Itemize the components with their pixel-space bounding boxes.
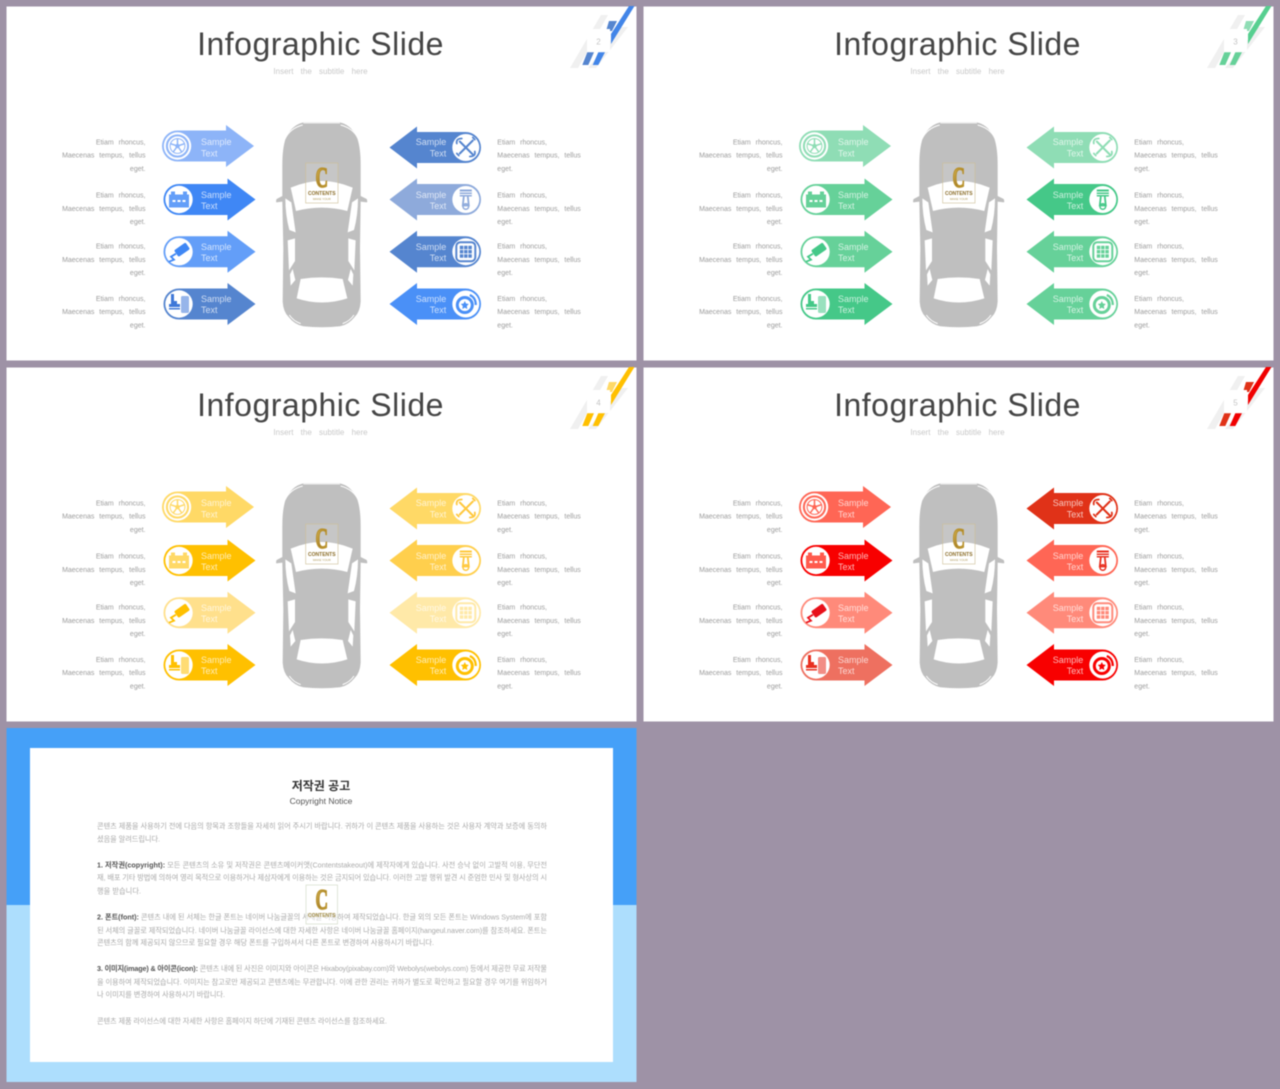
right arrows with icons: Text — [1067, 253, 1084, 263]
right arrows with icons: Sample — [416, 137, 446, 147]
logo watermark: C — [316, 163, 328, 194]
left arrows with icons: Text — [838, 253, 855, 263]
left descriptions — [62, 500, 146, 690]
left descriptions: Maecenas tempus, tellus — [62, 309, 146, 316]
right descriptions: Etiam rhoncus, — [1134, 657, 1184, 664]
left descriptions: eget. — [767, 270, 783, 277]
logo watermark: CONTENTS — [308, 913, 336, 919]
section 3: image and icon: 나 이미지를 변경하여 사용하시기 바랍니다. — [97, 990, 225, 999]
right arrows with icons: Text — [430, 253, 447, 263]
right descriptions: eget. — [1134, 580, 1150, 587]
right descriptions: Maecenas tempus, tellus — [497, 257, 581, 264]
left arrows with icons: Sample — [838, 655, 869, 665]
left arrows with icons: Sample — [201, 655, 232, 665]
right arrows with icons: Text — [430, 201, 447, 211]
right arrows with icons — [1026, 488, 1118, 686]
right arrows with icons: Sample — [416, 655, 446, 665]
right arrows with icons: Sample — [1053, 294, 1083, 304]
intro paragraph: 셨음을 알려드립니다. — [97, 834, 160, 844]
right descriptions: Etiam rhoncus, — [497, 554, 547, 560]
left descriptions: Maecenas tempus, tellus — [699, 567, 783, 574]
left arrows with icons: Text — [838, 562, 855, 572]
left descriptions: eget. — [767, 322, 783, 330]
left descriptions: eget. — [130, 322, 146, 330]
logo watermark: C — [316, 524, 328, 555]
left arrows with icons: Text — [201, 253, 218, 263]
car illustration — [913, 483, 1004, 688]
logo watermark: C — [953, 524, 965, 555]
section 2: font: 2. 폰트(font): 콘텐츠 내에 된 서체는 한글 폰트는 네이버 나눔글꼴의 서체를 이용하여 제작되었습니다. 한글 외의 모든 폰트는 Windows System에 포함 — [97, 912, 547, 922]
left descriptions: eget. — [767, 631, 783, 638]
right descriptions: eget. — [1134, 527, 1150, 534]
logo watermark — [306, 524, 338, 564]
left arrows with icons: Text — [201, 562, 218, 572]
right arrows with icons: Text — [1067, 666, 1084, 676]
right descriptions: Etiam rhoncus, — [497, 500, 547, 508]
left descriptions: Etiam rhoncus, — [733, 554, 783, 560]
car illustration — [276, 483, 367, 688]
left arrows with icons: Text — [838, 614, 855, 624]
right arrows with icons: Sample — [1053, 603, 1083, 613]
right descriptions: Maecenas tempus, tellus — [1134, 670, 1218, 677]
section 2: font — [97, 912, 547, 947]
left descriptions: Etiam rhoncus, — [96, 554, 146, 560]
title: Infographic Slide — [197, 387, 444, 423]
panel: yellow infographic slide — [6, 367, 636, 722]
left descriptions: Maecenas tempus, tellus — [62, 618, 146, 625]
left descriptions: eget. — [130, 270, 146, 277]
car illustration — [913, 122, 1004, 327]
left arrows with icons: Text — [201, 201, 218, 211]
left descriptions: eget. — [767, 580, 783, 587]
left descriptions: Maecenas tempus, tellus — [699, 206, 783, 213]
left arrows with icons: Sample — [201, 190, 232, 200]
left descriptions: Etiam rhoncus, — [96, 140, 146, 146]
right descriptions: eget. — [1134, 631, 1150, 638]
right arrows with icons: Text — [1067, 562, 1084, 572]
right arrows with icons: Text — [430, 562, 447, 572]
right arrows with icons: Sample — [416, 551, 446, 561]
left descriptions: Etiam rhoncus, — [733, 296, 783, 303]
left descriptions: Maecenas tempus, tellus — [62, 257, 146, 264]
right descriptions: Maecenas tempus, tellus — [497, 618, 581, 625]
left arrows with icons: Text — [838, 201, 855, 211]
right descriptions — [497, 140, 581, 330]
left descriptions: Etiam rhoncus, — [733, 244, 783, 250]
right descriptions: Maecenas tempus, tellus — [1134, 257, 1218, 264]
right descriptions: eget. — [497, 527, 513, 534]
right arrows with icons — [1026, 126, 1118, 325]
logo watermark: MAKE YOUR — [313, 197, 332, 201]
left descriptions: eget. — [130, 631, 146, 638]
left descriptions — [62, 140, 146, 330]
title: Infographic Slide — [834, 26, 1081, 62]
right descriptions: eget. — [497, 270, 513, 277]
left arrows with icons: Sample — [838, 551, 869, 561]
right arrows with icons: Text — [430, 510, 447, 520]
right descriptions: eget. — [497, 219, 513, 226]
section 1: copyright: 재, 배포 기타 방법에 의하여 영리 목적으로 이용하거나 제삼자에게 이용하는 것은 금지되어 있습니다. 이러한 고발 행위 발견 시 준엄한 민사 및 형사상의 시 — [97, 873, 547, 882]
subtitle: Insert the subtitle here — [910, 67, 1005, 76]
logo watermark: MAKE YOUR — [950, 197, 969, 201]
right descriptions: Etiam rhoncus, — [497, 140, 547, 146]
right descriptions: Etiam rhoncus, — [1134, 554, 1184, 560]
left arrows with icons: Sample — [201, 137, 232, 147]
right descriptions: Etiam rhoncus, — [1134, 244, 1184, 250]
right descriptions: Etiam rhoncus, — [497, 192, 547, 200]
right arrows with icons: Sample — [1053, 655, 1083, 665]
right arrows with icons: Sample — [416, 242, 446, 252]
right descriptions: Maecenas tempus, tellus — [497, 670, 581, 677]
left descriptions: Etiam rhoncus, — [96, 657, 146, 664]
left arrows with icons — [799, 125, 892, 325]
left descriptions: Etiam rhoncus, — [733, 604, 783, 612]
left descriptions: Etiam rhoncus, — [733, 140, 783, 146]
right descriptions: eget. — [1134, 166, 1150, 173]
right descriptions: eget. — [497, 580, 513, 587]
right arrows with icons: Text — [1067, 201, 1084, 211]
right arrows with icons: Text — [1067, 148, 1084, 158]
corner decoration with page number: 4 — [596, 398, 601, 408]
right arrows with icons: Sample — [1053, 242, 1083, 252]
logo watermark: CONTENTS — [945, 552, 973, 558]
right arrows with icons: Sample — [416, 294, 446, 304]
right descriptions: Etiam rhoncus, — [1134, 296, 1184, 303]
left descriptions — [699, 500, 783, 690]
left descriptions: Etiam rhoncus, — [96, 500, 146, 508]
panel: green infographic slide — [644, 6, 1274, 360]
closing note: 콘텐츠 제품 라이선스에 대한 자세한 사항은 홈페이지 하단에 기재된 콘텐츠 라이선스를 참조하세요. — [97, 1016, 387, 1026]
logo watermark: MAKE YOUR — [313, 558, 332, 562]
section 3: image and icon — [97, 964, 547, 999]
left descriptions — [699, 140, 783, 330]
right arrows with icons — [390, 488, 481, 686]
left descriptions: Maecenas tempus, tellus — [62, 206, 146, 213]
left descriptions: Etiam rhoncus, — [96, 604, 146, 612]
right descriptions — [1134, 500, 1218, 690]
right descriptions: eget. — [1134, 270, 1150, 277]
right descriptions: eget. — [1134, 322, 1150, 330]
left descriptions: eget. — [767, 527, 783, 534]
subtitle: Insert the subtitle here — [273, 428, 368, 437]
right descriptions: Maecenas tempus, tellus — [1134, 206, 1218, 213]
right descriptions — [497, 500, 581, 690]
corner decoration with page number: 3 — [1233, 38, 1238, 46]
left descriptions: Maecenas tempus, tellus — [699, 257, 783, 264]
left descriptions: eget. — [767, 684, 783, 690]
left arrows with icons: Sample — [201, 294, 232, 304]
left descriptions: Maecenas tempus, tellus — [62, 567, 146, 574]
section 1: copyright — [97, 860, 547, 896]
left arrows with icons: Text — [201, 614, 218, 624]
right arrows with icons: Sample — [1053, 137, 1083, 147]
logo watermark — [306, 163, 338, 203]
right descriptions: Etiam rhoncus, — [1134, 140, 1184, 146]
right descriptions: eget. — [497, 166, 513, 173]
corner decoration with page number — [570, 367, 634, 429]
left arrows with icons: Sample — [838, 294, 869, 304]
right descriptions: Maecenas tempus, tellus — [1134, 152, 1218, 160]
left descriptions: Maecenas tempus, tellus — [62, 670, 146, 677]
left arrows with icons: Sample — [838, 190, 869, 200]
right descriptions: Maecenas tempus, tellus — [497, 309, 581, 316]
right descriptions: Etiam rhoncus, — [1134, 192, 1184, 200]
left descriptions: Etiam rhoncus, — [96, 192, 146, 200]
intro paragraph: 콘텐츠 제품을 사용하기 전에 다음의 항목과 조항들을 자세히 읽어 주시기 바랍니다. 귀하가 이 콘텐츠 제품을 사용하는 것은 사용자 계약과 보증에 동의하 — [97, 822, 547, 830]
section 2: font: 콘텐츠의 함께 제공되지 않으므로 필요할 경우 해당 폰트를 구입하셔서 다른 폰트로 변경하여 사용하시기 바랍니다. — [97, 938, 434, 947]
left arrows with icons: Text — [838, 510, 855, 520]
intro paragraph — [97, 822, 547, 844]
copyright heading: 저작권 공고 — [292, 778, 350, 793]
title: Infographic Slide — [197, 26, 444, 62]
left descriptions: Maecenas tempus, tellus — [699, 309, 783, 316]
corner decoration with page number: 2 — [596, 38, 601, 46]
left descriptions: Maecenas tempus, tellus — [699, 618, 783, 625]
corner decoration with page number — [570, 6, 634, 68]
logo watermark — [306, 885, 338, 924]
right descriptions: Etiam rhoncus, — [497, 296, 547, 303]
right arrows with icons: Sample — [416, 603, 446, 613]
left arrows with icons: Text — [201, 148, 218, 158]
panel: blue infographic slide — [6, 6, 636, 360]
left arrows with icons: Sample — [201, 498, 232, 508]
corner decoration with page number: 5 — [1233, 398, 1238, 408]
panel: copyright notice slide — [6, 728, 636, 1082]
right arrows with icons: Text — [1067, 510, 1084, 520]
left descriptions: eget. — [767, 219, 783, 226]
left arrows with icons — [162, 125, 256, 325]
left arrows with icons: Text — [838, 305, 855, 315]
right descriptions: Maecenas tempus, tellus — [1134, 514, 1218, 520]
left descriptions: Maecenas tempus, tellus — [62, 514, 146, 520]
logo watermark: CONTENTS — [308, 552, 336, 558]
right descriptions: Maecenas tempus, tellus — [497, 514, 581, 520]
left descriptions: eget. — [130, 166, 146, 173]
right descriptions: Maecenas tempus, tellus — [1134, 567, 1218, 574]
left arrows with icons — [162, 486, 256, 686]
logo watermark: C — [953, 163, 965, 194]
right descriptions: eget. — [1134, 684, 1150, 690]
right descriptions — [1134, 140, 1218, 330]
right arrows with icons: Sample — [1053, 498, 1083, 508]
right descriptions: Maecenas tempus, tellus — [1134, 309, 1218, 316]
left descriptions: Etiam rhoncus, — [96, 296, 146, 303]
right arrows with icons: Text — [1067, 305, 1084, 315]
logo watermark: CONTENTS — [945, 191, 973, 197]
logo watermark — [943, 524, 975, 564]
right arrows with icons: Text — [430, 666, 447, 676]
right descriptions: Etiam rhoncus, — [1134, 500, 1184, 508]
section 3: image and icon: 3. 이미지(image) & 아이콘(icon): 콘텐츠 내에 된 사진은 이미지와 아이콘은 Hixaboy(pixabay.com)와 Webolys(webolys.com) 등에서 제공한 무료 저작물 — [97, 964, 547, 973]
right arrows with icons: Text — [430, 614, 447, 624]
right arrows with icons: Text — [1067, 614, 1084, 624]
right descriptions: Etiam rhoncus, — [497, 244, 547, 250]
left arrows with icons: Sample — [838, 603, 869, 613]
left arrows with icons: Text — [201, 510, 218, 520]
section 1: copyright: 1. 저작권(copyright): 모든 콘텐츠의 소유 및 저작권은 콘텐츠메이커앳(Contentstakeout)에 제작자에게 있습니다. 사전 승낙 없이 고발적 이용, 무단전 — [97, 860, 547, 870]
left descriptions: eget. — [130, 580, 146, 587]
subtitle: Insert the subtitle here — [273, 67, 368, 76]
right descriptions: eget. — [497, 684, 513, 690]
right arrows with icons: Sample — [416, 498, 446, 508]
left arrows with icons: Sample — [201, 603, 232, 613]
logo watermark: MAKE YOUR — [950, 558, 969, 562]
car illustration — [276, 122, 367, 327]
right descriptions: Etiam rhoncus, — [497, 657, 547, 664]
right descriptions: Etiam rhoncus, — [497, 604, 547, 612]
right descriptions: Etiam rhoncus, — [1134, 604, 1184, 612]
logo watermark — [943, 163, 975, 203]
section 3: image and icon: 을 이용하여 제작되었습니다. 이미지는 참고로만 제공되고 콘텐츠에는 무관합니다. 이에 관한 권리는 귀하가 별도로 확인하고 필요할 경우 여기를 위임하거 — [97, 978, 547, 986]
right arrows with icons: Sample — [1053, 551, 1083, 561]
left arrows with icons: Sample — [201, 551, 232, 561]
right descriptions: Maecenas tempus, tellus — [497, 567, 581, 574]
right descriptions: Maecenas tempus, tellus — [1134, 618, 1218, 625]
right descriptions: eget. — [1134, 219, 1150, 226]
left arrows with icons: Text — [838, 666, 855, 676]
left descriptions: Maecenas tempus, tellus — [699, 514, 783, 520]
left arrows with icons: Sample — [201, 242, 232, 252]
right descriptions: eget. — [497, 631, 513, 638]
right arrows with icons: Sample — [1053, 190, 1083, 200]
logo watermark: C — [316, 885, 328, 916]
left descriptions: Etiam rhoncus, — [733, 657, 783, 664]
right descriptions: Maecenas tempus, tellus — [497, 206, 581, 213]
right arrows with icons: Text — [430, 148, 447, 158]
corner decoration with page number — [1207, 6, 1272, 68]
left descriptions: Etiam rhoncus, — [733, 500, 783, 508]
right descriptions: Maecenas tempus, tellus — [497, 152, 581, 160]
copyright subheading: Copyright Notice — [290, 796, 353, 806]
right arrows with icons — [390, 126, 481, 325]
right arrows with icons: Text — [430, 305, 447, 315]
right arrows with icons: Sample — [416, 190, 446, 200]
left arrows with icons — [799, 486, 892, 686]
left arrows with icons: Sample — [838, 242, 869, 252]
left descriptions: eget. — [767, 166, 783, 173]
right descriptions: eget. — [497, 322, 513, 330]
left arrows with icons: Text — [838, 148, 855, 158]
subtitle: Insert the subtitle here — [910, 428, 1005, 437]
left descriptions: eget. — [130, 219, 146, 226]
left descriptions: eget. — [130, 684, 146, 690]
left arrows with icons: Sample — [838, 498, 869, 508]
title: Infographic Slide — [834, 387, 1081, 423]
left descriptions: Maecenas tempus, tellus — [699, 670, 783, 677]
logo watermark: CONTENTS — [308, 191, 336, 197]
left descriptions: eget. — [130, 527, 146, 534]
left descriptions: Etiam rhoncus, — [96, 244, 146, 250]
section 1: copyright: 행을 받습니다. — [97, 886, 141, 896]
left descriptions: Maecenas tempus, tellus — [62, 152, 146, 160]
panel: red infographic slide — [644, 367, 1274, 722]
left arrows with icons: Sample — [838, 137, 869, 147]
left arrows with icons: Text — [201, 666, 218, 676]
corner decoration with page number — [1207, 367, 1272, 429]
left descriptions: Maecenas tempus, tellus — [699, 152, 783, 160]
section 2: font: 된 서체의 글꼴로 제작되었습니다. 네이버 나눔글꼴 라이선스에 대한 자세한 사항은 네이버 나눔글꼴 홈페이지(hangeul.naver.com)를 참조하세요. 폰트는 — [97, 926, 547, 935]
left arrows with icons: Text — [201, 305, 218, 315]
left descriptions: Etiam rhoncus, — [733, 192, 783, 200]
